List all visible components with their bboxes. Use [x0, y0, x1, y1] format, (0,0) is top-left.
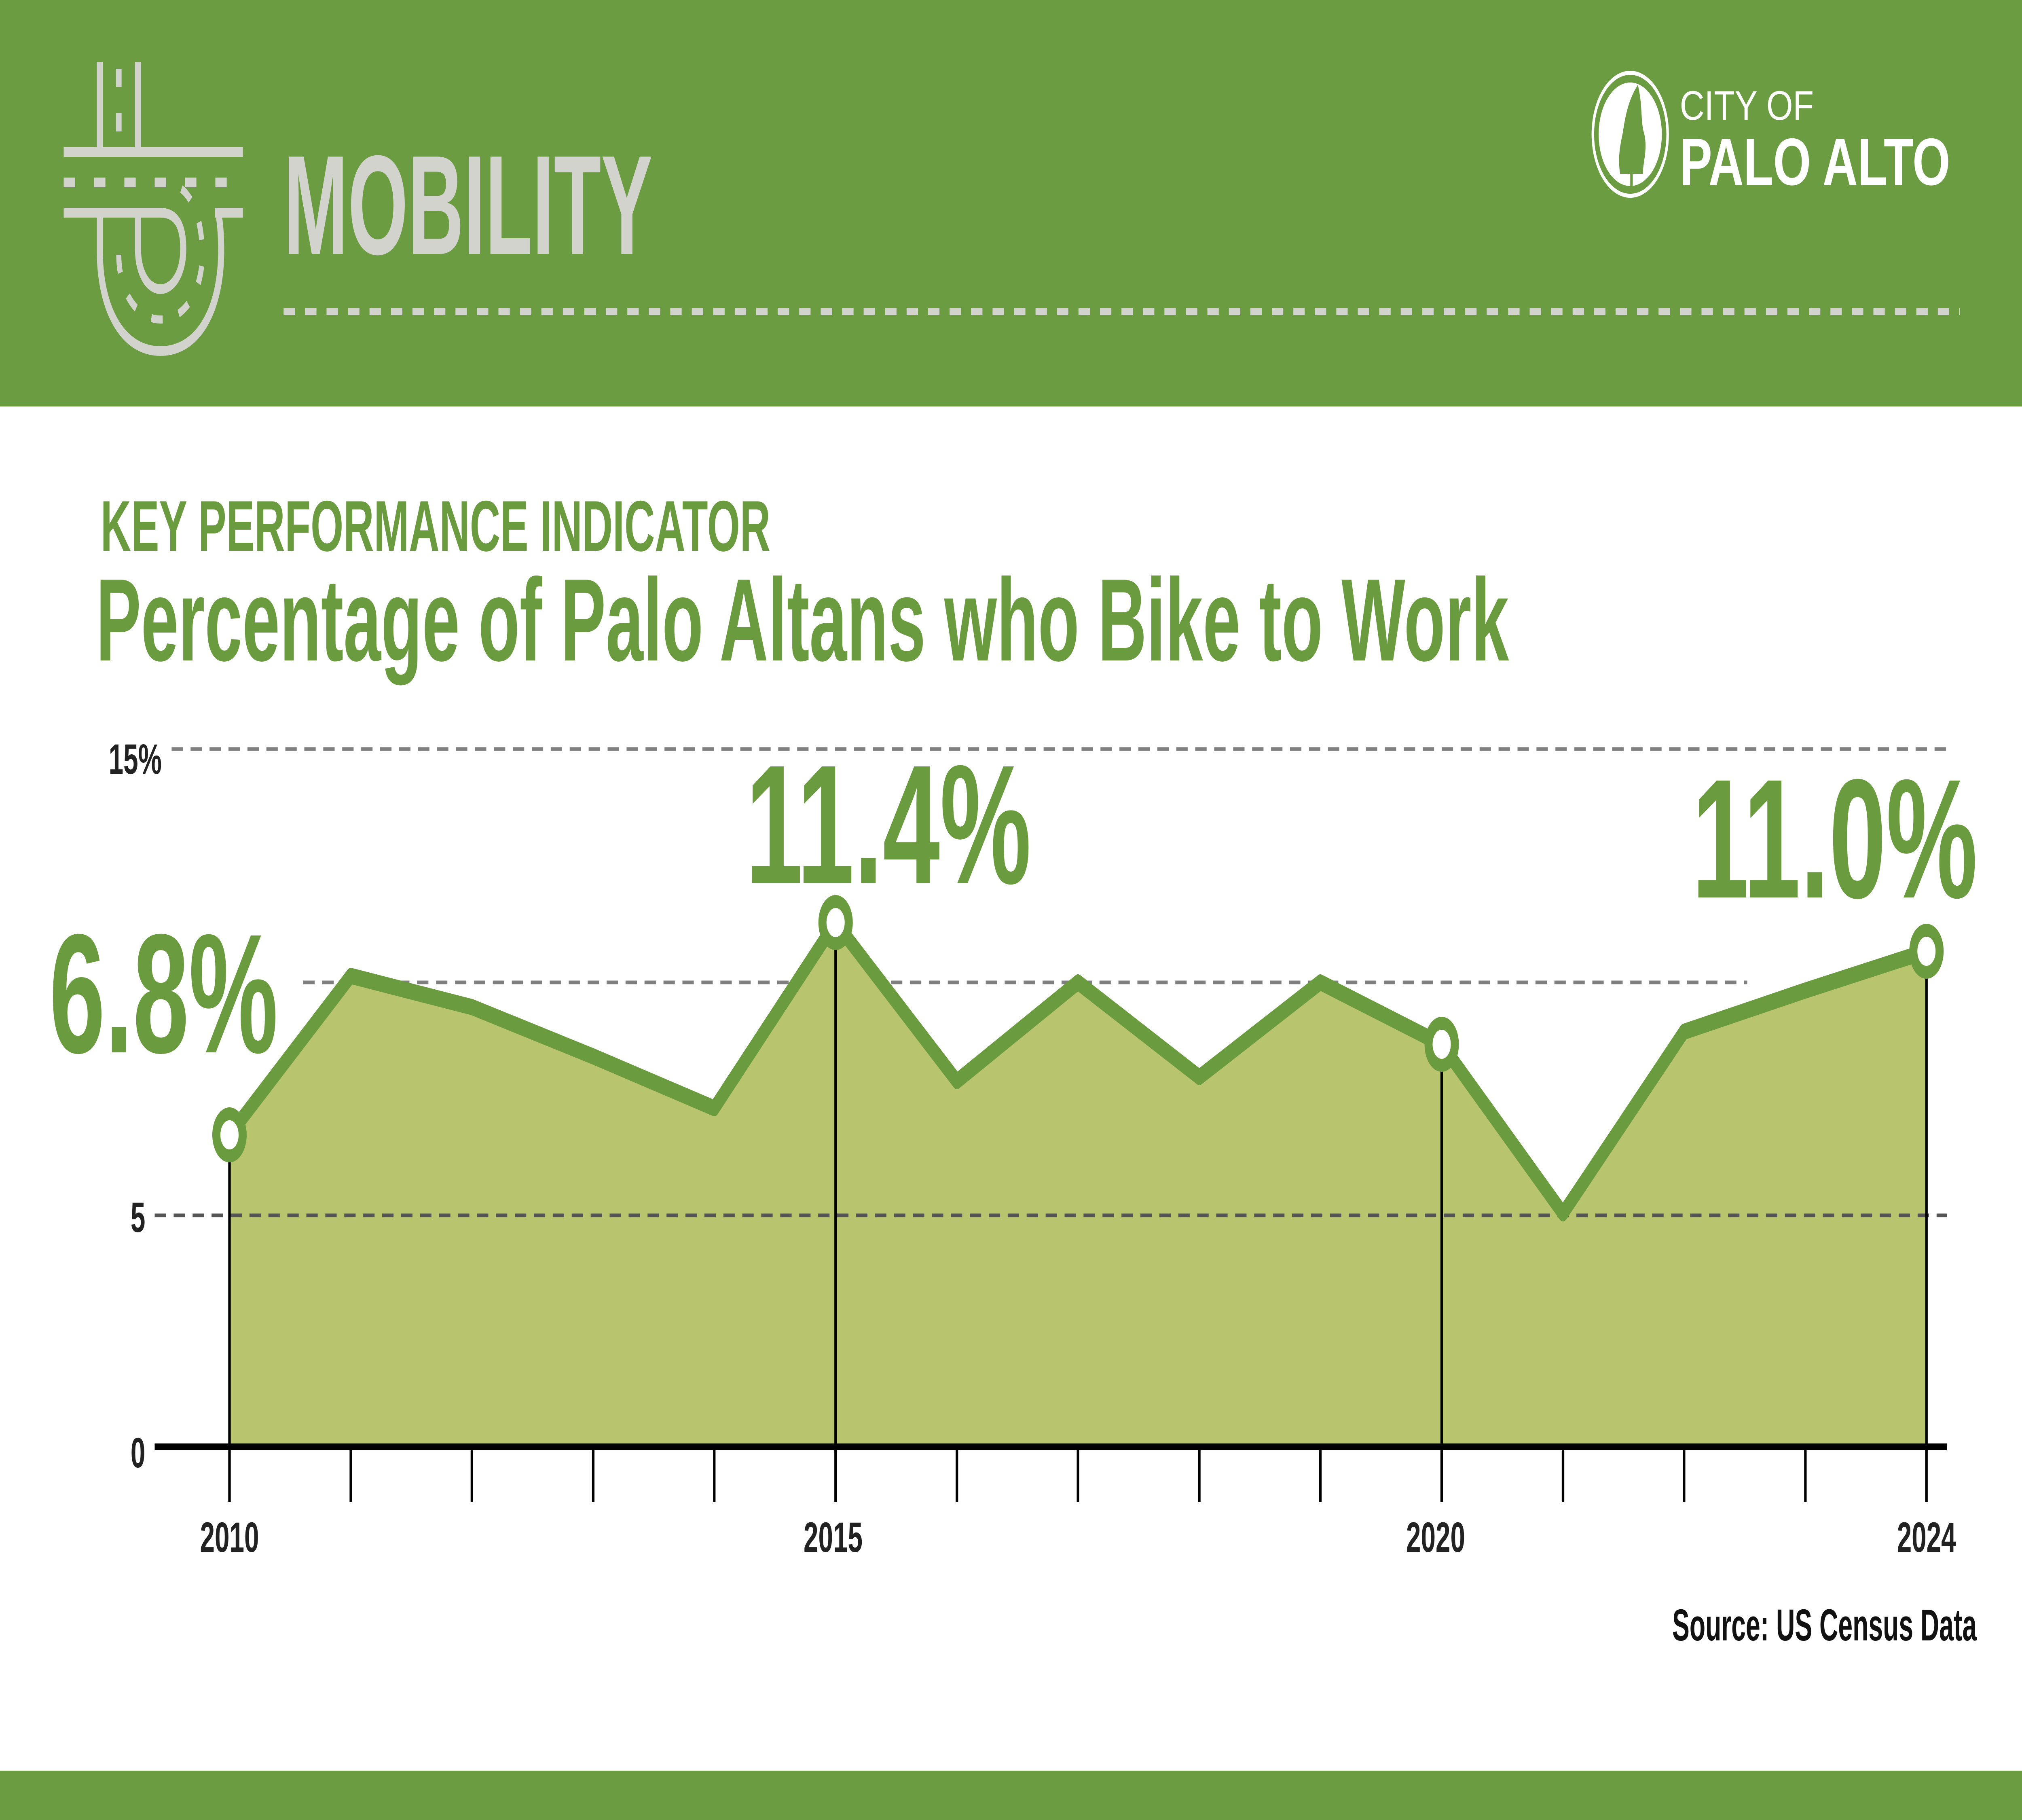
callout values [49, 730, 1978, 1089]
logo: City of Palo Alto: CITY OF [1680, 83, 1814, 129]
y axis labels: 0 [131, 1429, 145, 1477]
icon: tree [1619, 85, 1646, 186]
y axis labels [109, 735, 162, 1477]
logo: City of Palo Alto: PALO ALTO [1680, 125, 1950, 199]
x axis labels [200, 1513, 1956, 1561]
callout values: 11.4% [746, 730, 1031, 920]
y axis labels: 5 [131, 1194, 145, 1241]
title: Percentage of Palo Altans who Bike to Work [96, 555, 1509, 686]
callout values: 11.0% [1692, 744, 1978, 934]
callout values: 6.8% [49, 899, 278, 1089]
source note: Source: US Census Data [1672, 1601, 1977, 1650]
area chart [49, 730, 1978, 1561]
x axis labels: 2020 [1406, 1513, 1465, 1561]
x axis labels: 2010 [200, 1513, 259, 1561]
x axis labels: 2015 [804, 1513, 863, 1561]
header band [0, 0, 2022, 406]
logo: City of Palo Alto [1593, 73, 1950, 199]
subtitle: KPI: KEY PERFORMANCE INDICATOR [101, 486, 770, 566]
header title: MOBILITY [283, 126, 653, 284]
x axis labels: 2024 [1897, 1513, 1956, 1561]
y axis labels: 15% [109, 735, 162, 783]
icon: road interchange [64, 62, 243, 351]
footer band [0, 1771, 2022, 1820]
